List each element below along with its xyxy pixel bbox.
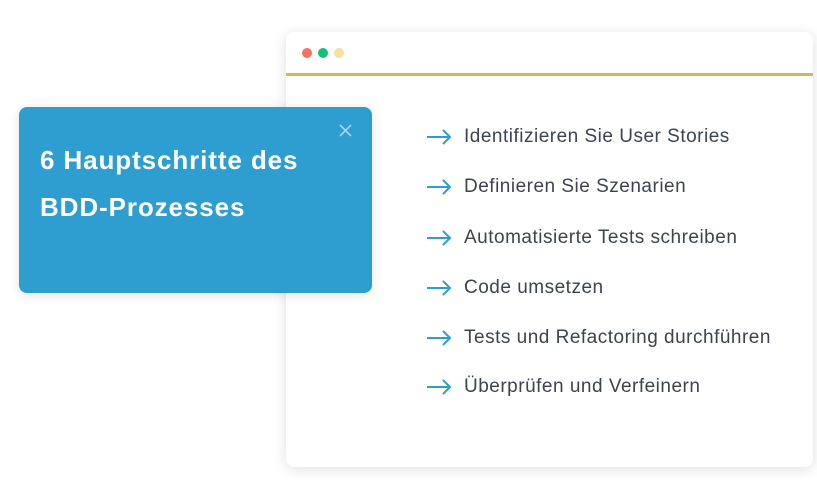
- icon: close: [340, 124, 352, 136]
- heading: [40, 145, 298, 222]
- panel: browser window: [286, 32, 813, 467]
- step 3: Automatisierte Tests schreiben: [464, 227, 737, 248]
- heading: 6 Hauptschritte des: [40, 145, 298, 175]
- step 4: Code umsetzen: [464, 277, 604, 298]
- step 2: Definieren Sie Szenarien: [464, 176, 686, 197]
- heading: BDD-Prozesses: [40, 192, 245, 222]
- list: steps: [427, 126, 771, 397]
- step 5: Tests und Refactoring durchführen: [464, 327, 771, 348]
- step 1: Identifizieren Sie User Stories: [464, 126, 730, 147]
- step 6: Überprüfen und Verfeinern: [464, 376, 700, 397]
- icon: window dots: [302, 48, 344, 58]
- panel: title card: [19, 107, 372, 293]
